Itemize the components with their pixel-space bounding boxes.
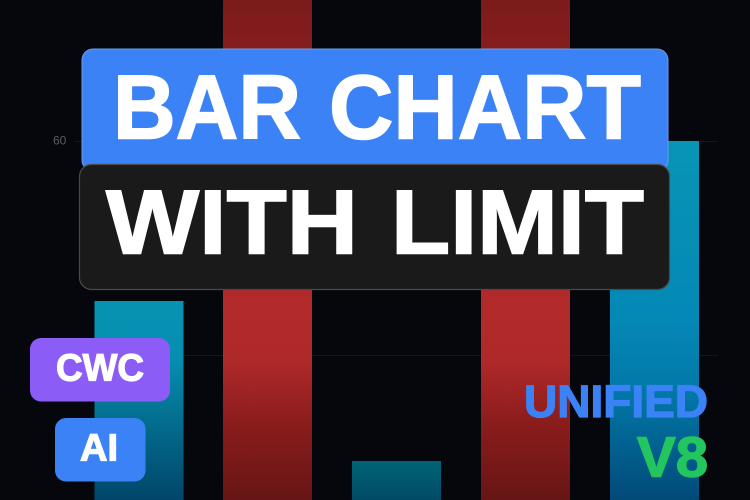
bar 3 short teal: [352, 461, 441, 500]
badge: CWC: [30, 338, 170, 402]
title banner: BAR CHART: [82, 49, 668, 171]
badge: AI: AI: [80, 428, 118, 470]
bar 1 teal: [94, 301, 184, 500]
badge: AI: [55, 418, 146, 482]
label: V8: V8: [637, 426, 708, 490]
bar 4 red over limit: [481, 0, 570, 500]
title banner: BAR CHART: BAR: [113, 58, 301, 158]
title banner: WITH LIMIT: WITH: [106, 172, 358, 274]
title banner: WITH LIMIT: LIMIT: [391, 172, 644, 274]
bar 2 red over limit: [223, 0, 312, 500]
bar 5 tall blue-teal: [610, 141, 699, 500]
title banner: BAR CHART: CHART: [329, 58, 641, 158]
y-axis label 60: 60: [53, 134, 67, 148]
label: UNIFIED: UNIFIED: [524, 376, 708, 427]
badge: CWC: CWC: [56, 348, 144, 390]
title banner: WITH LIMIT: [80, 164, 670, 290]
